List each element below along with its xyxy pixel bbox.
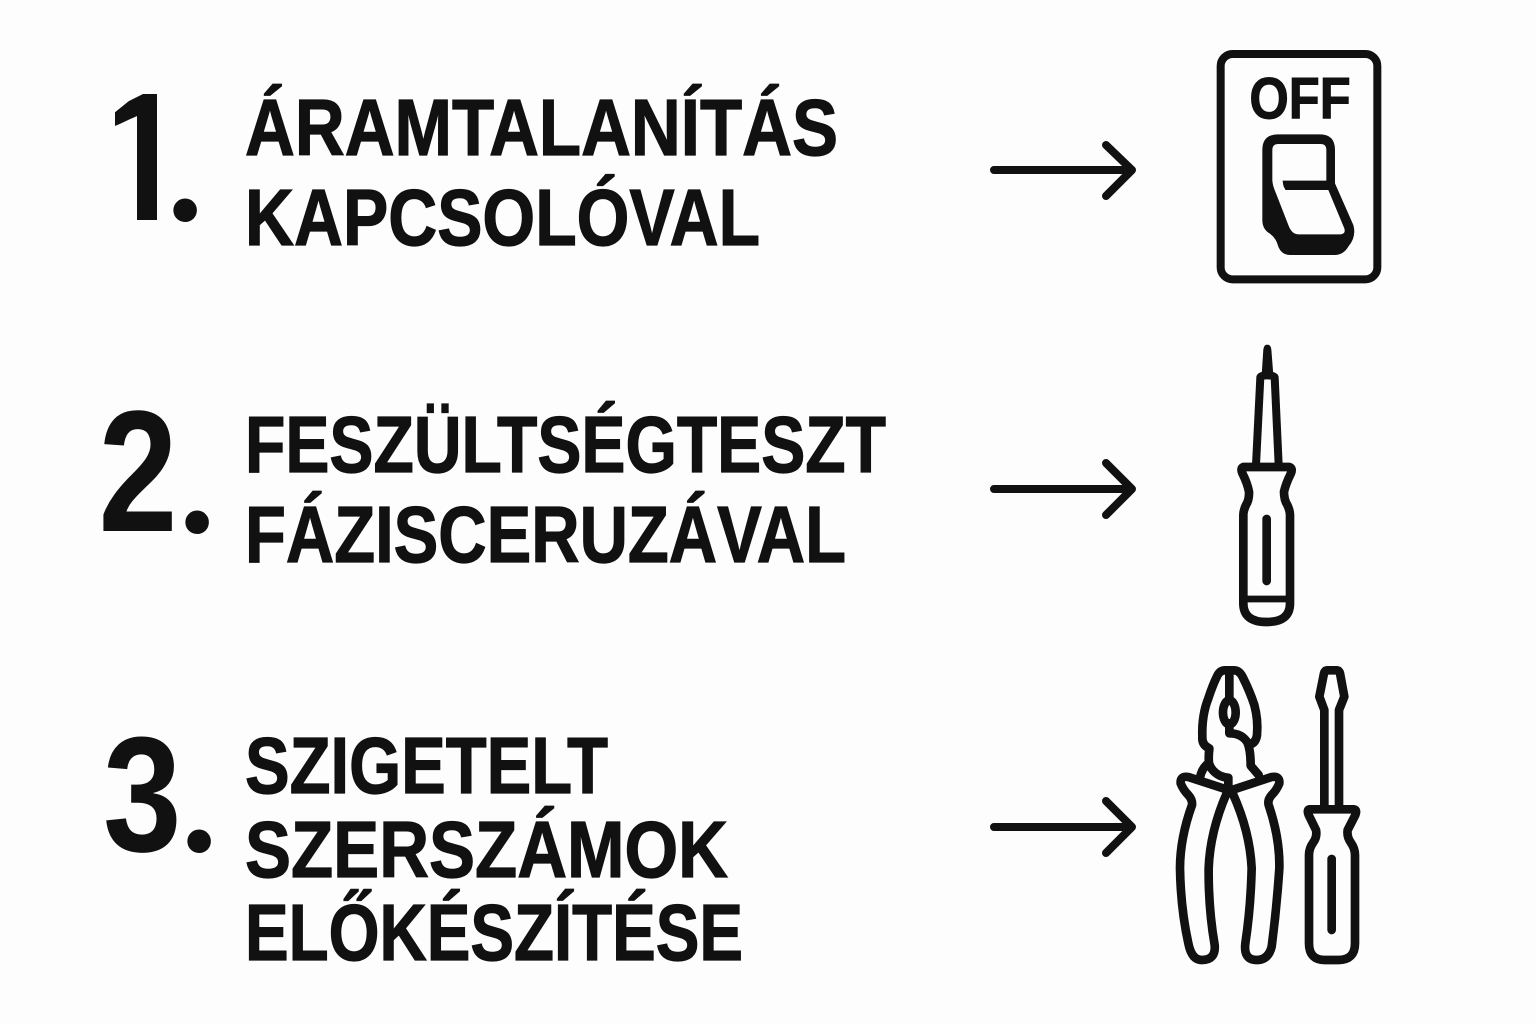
heading: step 2 — [245, 400, 886, 579]
heading: step 1: KAPCSOLÓVAL — [245, 173, 760, 262]
heading: step 2: FESZÜLTSÉGTESZT — [245, 400, 886, 489]
heading: step 3: SZIGETELT — [245, 721, 608, 810]
number 1 — [115, 94, 197, 222]
heading: step 1 — [245, 83, 838, 262]
number 1: 1 — [108, 60, 188, 261]
number 3: 3 — [103, 703, 182, 886]
pliers — [1180, 670, 1279, 960]
heading: step 3 — [245, 721, 743, 977]
heading: step 3: SZERSZÁMOK — [245, 805, 728, 894]
icon: phase tester screwdriver — [1241, 345, 1292, 622]
icon: off switch: OFF — [1249, 67, 1351, 131]
arrow: step 1 — [994, 145, 1132, 196]
icon: pliers and screwdriver — [1180, 670, 1356, 960]
icon: off switch — [1221, 54, 1377, 279]
number 3: . — [181, 723, 217, 883]
heading: step 2: FÁZISCERUZÁVAL — [245, 490, 846, 579]
number 1: . — [167, 92, 203, 252]
heading: step 1: ÁRAMTALANÍTÁS — [245, 83, 838, 172]
heading: step 3: ELŐKÉSZÍTÉSE — [245, 888, 743, 977]
number 2: 2 — [98, 374, 178, 568]
screwdriver — [1308, 670, 1356, 960]
arrow: step 3 — [994, 801, 1132, 853]
number 2: . — [179, 404, 215, 564]
arrow: step 2 — [994, 463, 1132, 515]
